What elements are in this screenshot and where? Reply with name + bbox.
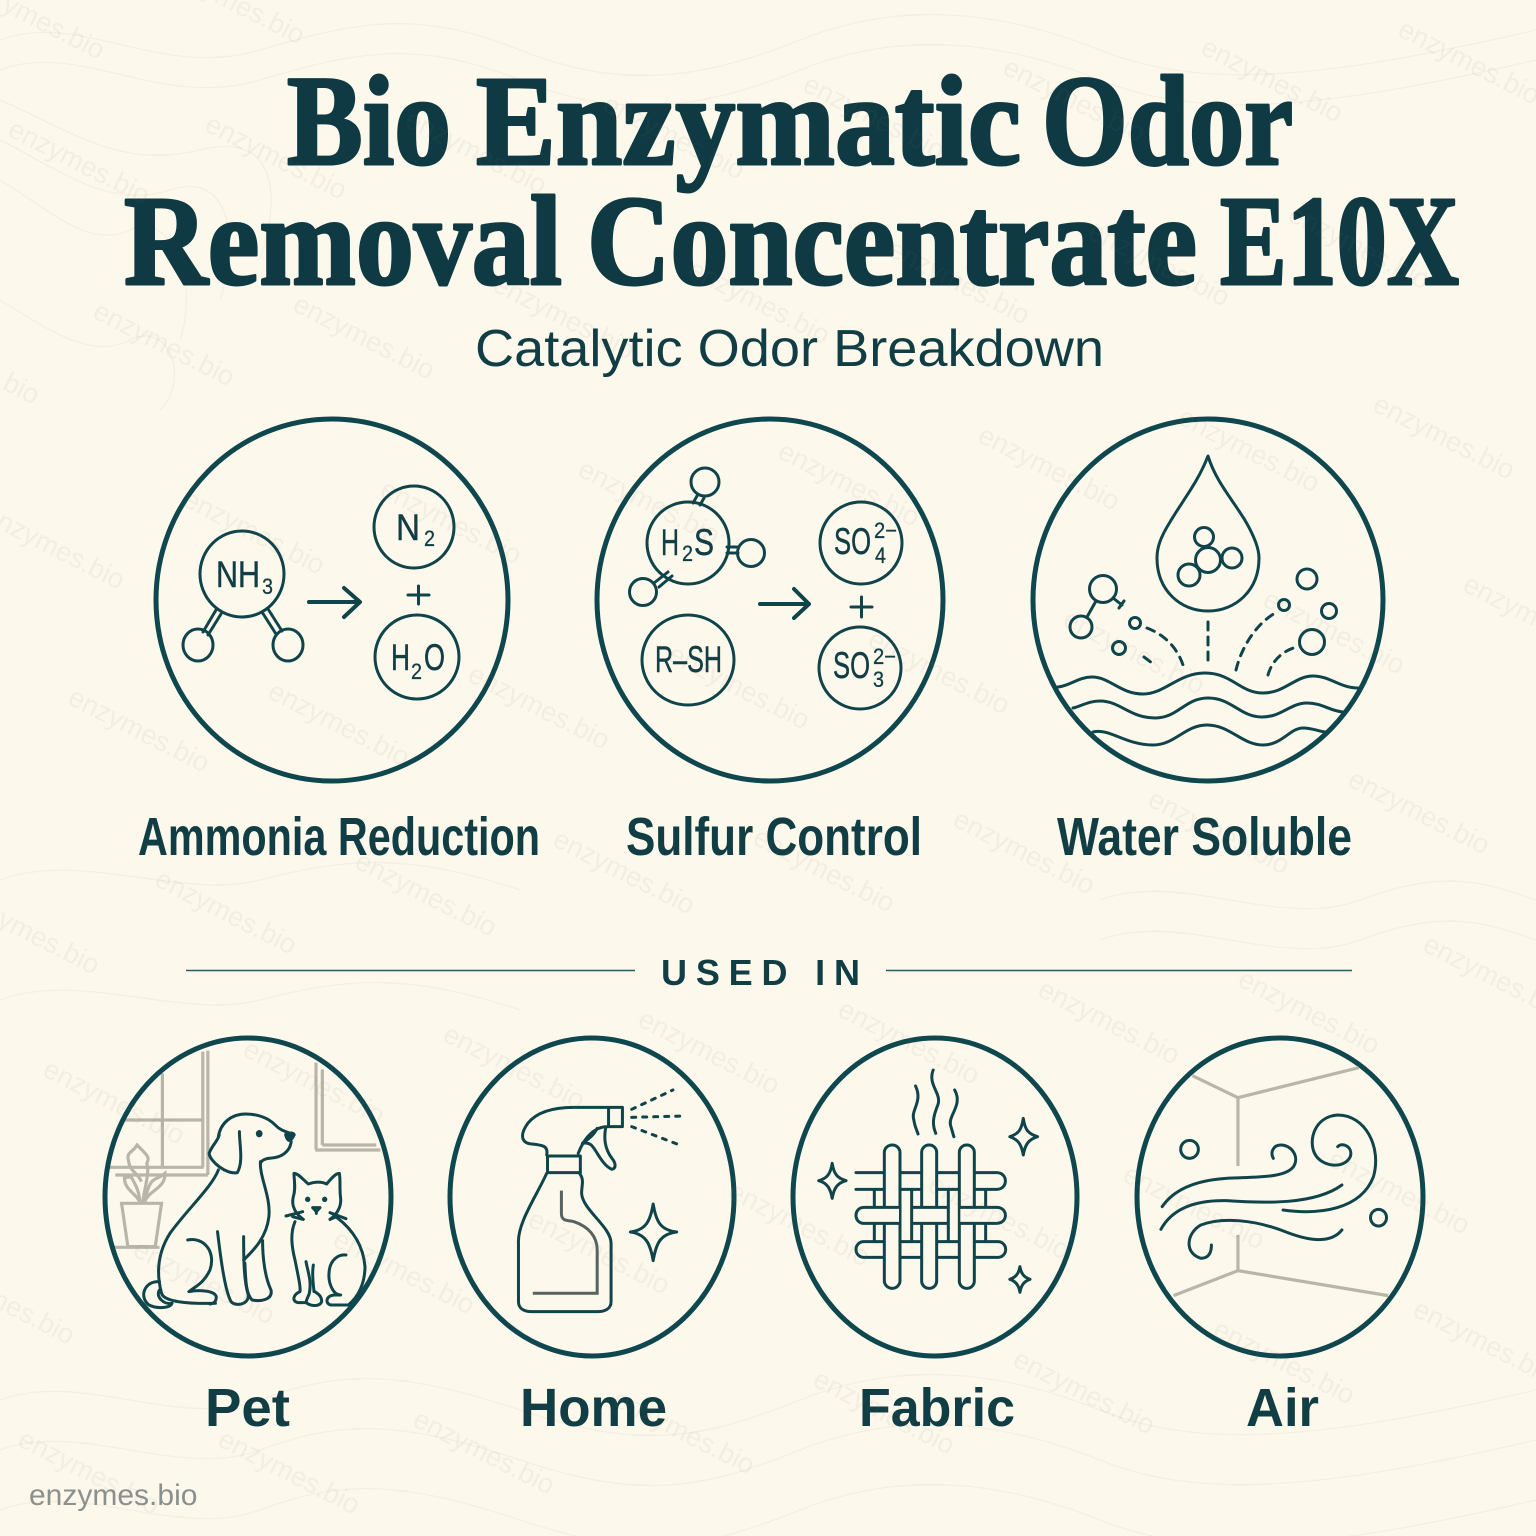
title (124, 50, 1459, 312)
text: enzymes.bio (923, 1168, 1075, 1265)
title: Removal (124, 170, 562, 312)
text: enzymes.bio (1343, 763, 1495, 860)
text: enzymes.bio (948, 803, 1100, 900)
bottle (518, 1107, 622, 1312)
text: enzymes.bio (1143, 783, 1295, 880)
text: enzymes.bio (1008, 1343, 1160, 1440)
dog (144, 1114, 294, 1308)
water drop with molecule (1157, 456, 1259, 611)
label: fabric: Fabric (859, 1378, 1015, 1438)
panel: sulfur control (597, 419, 943, 781)
left molecule and droplets (1070, 576, 1184, 668)
air illustration (1161, 1068, 1388, 1296)
panel: water soluble (1033, 419, 1383, 781)
title: Bio (287, 50, 451, 192)
text: enzymes.bio (350, 845, 502, 942)
arrow (309, 588, 360, 617)
text: enzymes.bio (200, 108, 352, 205)
text: enzymes.bio (723, 1175, 875, 1272)
text: enzymes.bio (548, 823, 700, 920)
section heading: used in: USED IN (661, 952, 860, 993)
text: enzymes.bio (798, 68, 950, 165)
text: enzymes.bio (663, 638, 815, 735)
text: enzymes.bio (1208, 1313, 1360, 1410)
SO4: SO (834, 521, 871, 562)
text: enzymes.bio (773, 435, 925, 532)
NH3 molecule (183, 531, 303, 661)
text: enzymes.bio (748, 821, 900, 918)
SO3: 3 (873, 667, 884, 692)
label: ammonia reduction: Ammonia Reduction (138, 807, 540, 867)
text: enzymes.bio (523, 1203, 675, 1300)
text: enzymes.bio (1368, 388, 1520, 485)
NH3 molecule: NH (216, 554, 260, 595)
text: enzymes.bio (128, 1233, 280, 1330)
label: air: Air (1246, 1378, 1319, 1438)
subtitle: Catalytic Odor Breakdown (475, 320, 1104, 378)
R-SH (642, 615, 734, 705)
label: home: Home (520, 1378, 667, 1438)
text: enzymes.bio (400, 103, 552, 200)
liquid line (533, 1191, 597, 1293)
text: enzymes.bio (1118, 1158, 1270, 1255)
text: enzymes.bio (1033, 973, 1185, 1070)
SO4: 4 (875, 543, 886, 568)
text: enzymes.bio (1283, 198, 1435, 295)
right droplets (1208, 569, 1336, 675)
N2 (374, 486, 454, 568)
ring (597, 419, 943, 781)
text: enzymes.bio (88, 295, 240, 392)
text: enzymes.bio (883, 233, 1035, 330)
panel: fabric (793, 1038, 1077, 1356)
text: enzymes.bio (863, 623, 1015, 720)
text: enzymes.bio (150, 863, 302, 960)
text: enzymes.bio (263, 675, 415, 772)
ring (1033, 419, 1383, 781)
spray bottle illustration (518, 1090, 686, 1312)
SO3 (819, 627, 901, 709)
text: enzymes.bio (408, 1403, 560, 1500)
text: enzymes.bio (63, 681, 215, 778)
ring (1137, 1038, 1423, 1356)
text: enzymes.bio (238, 1033, 390, 1130)
title: Concentrate (587, 170, 1197, 312)
title: Odor (1042, 50, 1293, 192)
sparkle (630, 1204, 677, 1261)
text: enzymes.bio (463, 658, 615, 755)
SO3: SO (833, 645, 870, 686)
text: enzymes.bio (375, 473, 527, 570)
N2: 2 (424, 526, 435, 551)
room corner lines (1174, 1068, 1388, 1296)
text: enzymes.bio (608, 1383, 760, 1480)
text: enzymes.bio (3, 113, 155, 210)
window and plant background (109, 1051, 380, 1247)
text: enzymes.bio (1258, 583, 1410, 680)
label: water soluble: Water Soluble (1057, 807, 1352, 867)
text: enzymes.bio (1058, 603, 1210, 700)
plus (851, 597, 872, 617)
H2S molecule (630, 468, 764, 606)
panel: air (1137, 1038, 1423, 1356)
text: enzymes.bio (973, 419, 1125, 516)
text: enzymes.bio (38, 1053, 190, 1150)
text: enzymes.bio (1233, 963, 1385, 1060)
woven fabric (856, 1145, 1006, 1288)
ring (156, 419, 508, 781)
text: enzymes.bio (573, 453, 725, 550)
text: enzymes.bio (633, 1003, 785, 1100)
wind swirls (1161, 1115, 1387, 1258)
SO3: 2− (873, 644, 896, 669)
text: enzymes.bio (213, 1423, 365, 1520)
SO4: 2− (874, 518, 897, 543)
text: enzymes.bio (13, 1423, 165, 1520)
pet illustration (109, 1051, 380, 1308)
cat (286, 1173, 365, 1306)
text: enzymes.bio (1083, 215, 1235, 312)
arrow (760, 589, 809, 618)
H2O: O (424, 637, 445, 678)
panel: ammonia reduction (156, 419, 508, 781)
text: enzymes.bio (1323, 1143, 1475, 1240)
water waves (1058, 673, 1358, 745)
text: enzymes.bio (288, 288, 440, 385)
NH3 molecule: 3 (262, 574, 273, 599)
text: enzymes.bio (328, 1223, 480, 1320)
text: enzymes.bio (1196, 31, 1348, 128)
H2O (375, 615, 459, 699)
plus (408, 586, 429, 604)
title: Enzymatic (476, 50, 1021, 192)
N2: N (396, 507, 420, 548)
ring (450, 1038, 734, 1356)
SO4 (820, 502, 902, 584)
text: enzymes.bio (438, 1018, 590, 1115)
H2O: H (391, 637, 410, 678)
H2O: 2 (411, 659, 422, 684)
footer brand: enzymes.bio (29, 1479, 197, 1512)
spray mist (632, 1090, 686, 1146)
text: enzymes.bio (598, 88, 750, 185)
panel: home (450, 1038, 734, 1356)
text: enzymes.bio (178, 483, 330, 580)
R-SH: R–SH (655, 639, 722, 680)
title: E10X (1220, 170, 1459, 312)
odor steam and sparkles (819, 1070, 1038, 1292)
ring (793, 1038, 1077, 1356)
label: pet: Pet (205, 1378, 290, 1438)
label: sulfur control: Sulfur Control (626, 807, 922, 867)
fabric illustration (819, 1070, 1038, 1292)
text: enzymes.bio (683, 253, 835, 350)
text: enzymes.bio (833, 993, 985, 1090)
panel: pet (105, 1038, 391, 1356)
text: enzymes.bio (808, 1363, 960, 1460)
H2S molecule: 2 (682, 541, 693, 566)
text: enzymes.bio (1173, 401, 1325, 498)
H2S molecule: H (661, 522, 679, 563)
H2S molecule: S (694, 522, 714, 563)
text: enzymes.bio (998, 51, 1150, 148)
text: enzymes.bio (488, 268, 640, 365)
ring (105, 1038, 391, 1356)
